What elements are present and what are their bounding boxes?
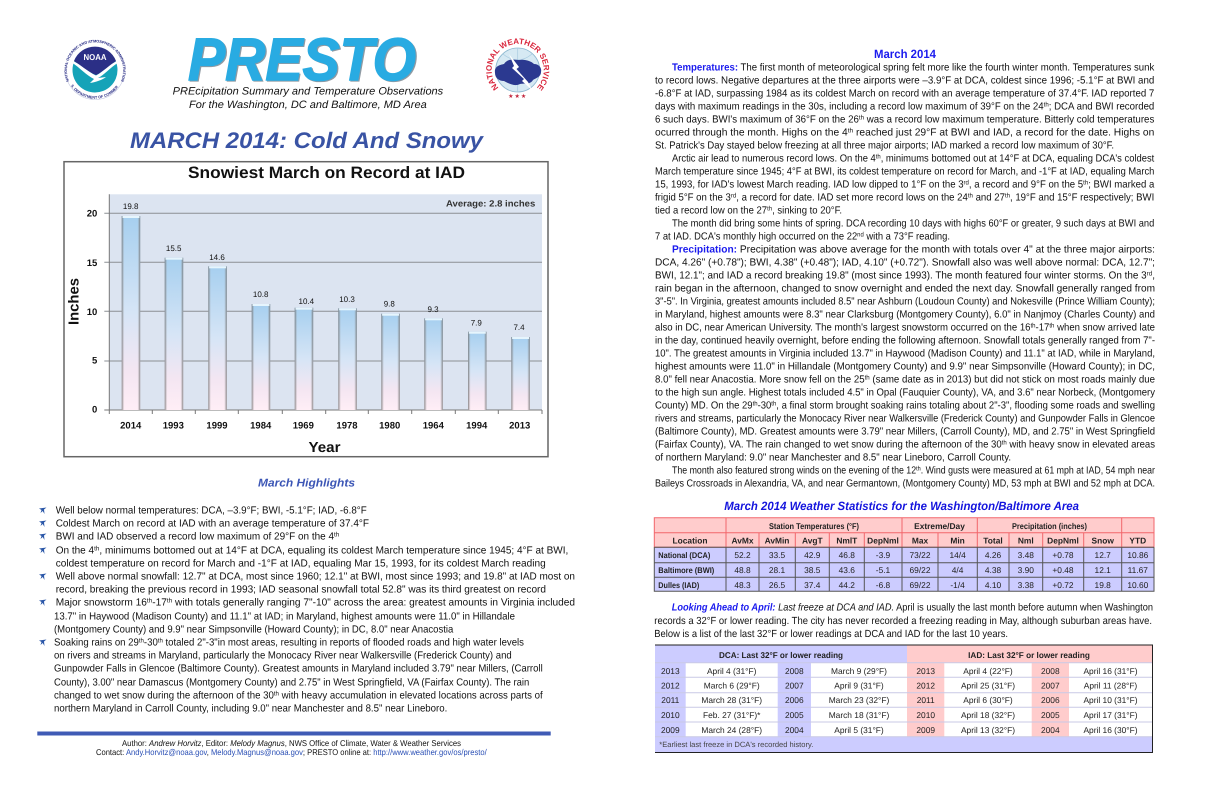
x axis labels: 2013 — [509, 420, 530, 432]
text block: temperatures: , a record and 9°F on the 5 — [969, 180, 1083, 191]
text block: precipitation: in the day, continued heavily overnight, before ending the following afternoon. Snowfall totals generally ranged from 7"- — [655, 336, 1155, 347]
row: National (DCA) — [658, 550, 1149, 560]
data labels: 14.6 — [209, 253, 225, 262]
text block: precipitation: of northern Maryland: 9.0" near Manchester and 8.5" near Lineboro, Carroll County. — [655, 453, 1011, 464]
text block: temperatures: rd — [731, 193, 737, 200]
text block: precipitation: -30 — [758, 401, 772, 412]
text block: precipitation: th — [1031, 323, 1036, 330]
text block: precipitation — [655, 245, 1156, 490]
IAD dates: April 13 (32°F) — [961, 725, 1015, 735]
data labels — [123, 202, 525, 332]
y axis title: Inches — [66, 278, 82, 325]
table header — [673, 521, 1146, 545]
text block: looking ahead to April: records a 32°F or lower reading. The city has never recorded a freezing reading in May, although suburban areas have. — [654, 616, 1152, 627]
y axis labels: 5 — [92, 356, 98, 366]
x axis labels: 1994 — [466, 420, 488, 432]
IAD dates: April 16 (31°F) — [1083, 666, 1138, 676]
text block: precipitation: th — [865, 375, 870, 382]
text block: precipitation: in Maryland, highest amounts were 8.3" near Clarksburg (Montgomery County), 6.0" in Nanjmoy (Charles County) and — [655, 310, 1155, 321]
text block: precipitation: , a final storm brought soaking rains totaling about 2"-3", flooding some roads and swelling — [776, 401, 1155, 412]
text block: temperatures: Temperatures: The first month of meteorological spring felt more like the fourth winter month. Temperatures sunk — [672, 63, 1155, 74]
y axis labels: 20 — [87, 208, 97, 220]
x axis labels: 1999 — [206, 420, 228, 432]
text block: precipitation: th — [771, 401, 777, 408]
DCA dates: March 6 (29°F) — [704, 680, 760, 690]
row: Baltimore (BWI): 4.38 — [985, 565, 1001, 575]
highlights text: Coldest March on record at IAD with an average temperature of 37.4°F — [56, 519, 369, 530]
highlights text: th — [167, 598, 173, 605]
text block: precipitation: also in DC, near American University. The month's largest snowstorm occurred on the 16 — [655, 323, 1059, 334]
IAD dates: April 10 (31°F) — [1083, 695, 1138, 705]
row: Dulles (IAD): 19.8 — [1095, 580, 1111, 590]
y axis labels: 15 — [87, 258, 98, 269]
text block: temperatures: 7 at IAD. DCA's monthly high occurred on the 22 — [655, 232, 877, 243]
IAD dates: April 16 (30°F) — [1083, 725, 1138, 735]
text block: temperatures: th — [1005, 193, 1010, 200]
table header: Total — [983, 535, 1003, 545]
data labels: 7.4 — [513, 323, 525, 332]
text block: temperatures: th — [876, 154, 881, 161]
footer credits: Contact: Andy.Horvitz@noaa.gov, Melody.Magnus@noaa.gov; PRESTO online at: http://www.weather.gov/os/presto/ — [96, 747, 487, 757]
row: Baltimore (BWI): 69/22 — [910, 565, 931, 575]
text block: precipitation: County) MD. On the 29 — [655, 401, 761, 412]
row: Baltimore (BWI): 11.67 — [1128, 565, 1148, 575]
text block: looking ahead to April: Looking Ahead to April: Last freeze at DCA and IAD. April is usually the last month before autumn when Washington — [672, 603, 1153, 614]
data labels: 9.8 — [384, 300, 395, 309]
footer credits — [96, 738, 487, 757]
highlights text: th — [139, 638, 144, 645]
row: Dulles (IAD): -1/4 — [950, 580, 965, 590]
table header: NmlT — [836, 535, 858, 545]
table header: Precipitation (inches) — [1012, 521, 1087, 531]
text block: temperatures: tied a record low on the 27 — [655, 206, 776, 217]
data labels: 9.3 — [427, 305, 439, 314]
text block: precipitation: Baileys Crossroads in Alexandria, VA, and near Germantown, (Montgomery County) MD, 53 mph at BWI and 52 mph at DCA. — [655, 479, 1155, 490]
text block: precipitation: -17 — [1036, 323, 1050, 334]
row: National (DCA): 73/22 — [910, 550, 931, 560]
IAD dates: 2011 — [917, 695, 935, 705]
row: National (DCA): 42.9 — [804, 550, 821, 560]
text block: precipitation: BWI, 12.1"; and IAD a record breaking 19.8" (most since 1993). The month featured four winter storms. On the 3 — [655, 271, 1166, 282]
IAD dates: 2012 — [916, 680, 935, 690]
row: Baltimore (BWI): 28.1 — [769, 565, 785, 575]
text block: precipitation: , — [1152, 271, 1155, 282]
highlights text: with heavy accumulation in elevated locations across parts of — [279, 690, 543, 701]
row: National (DCA): 3.48 — [1018, 550, 1034, 560]
text block: temperatures: -6.8°F at IAD, surpassing 1984 as its coldest March on record with an average temperature of 37.4°F. IAD reported 7 — [655, 89, 1155, 100]
text block: precipitation: (Baltimore County), MD. Greatest amounts were 3.79" near Millers, (Carroll County), MD, and 2.75" in West Springfield — [655, 427, 1155, 438]
data labels: 10.8 — [253, 290, 269, 299]
text block: precipitation: rd — [1147, 271, 1153, 278]
IAD dates: April 17 (31°F) — [1083, 710, 1138, 720]
row: National (DCA): 14/4 — [949, 550, 966, 560]
highlights text: Major snowstorm 16 — [56, 598, 148, 609]
text block: precipitation: rivers and streams, particularly the Monocacy River near Walkersville (Frederick County) and Gunpowder Falls in Glencoe — [655, 414, 1155, 425]
highlights text: coldest temperature on record for March and -1°F at IAD, equaling Mar 15, 1993, for its coldest March reading — [56, 559, 546, 570]
x axis labels: 1980 — [379, 420, 400, 432]
text block: precipitation: th — [1049, 323, 1055, 330]
row: National (DCA): 12.7 — [1095, 550, 1111, 560]
highlights text: On the 4 — [56, 546, 95, 557]
highlights text: totaled 2"-3"in most areas, resulting in reports of flooded roads and high water levels — [163, 638, 524, 649]
average note: Average: 2.8 inches — [446, 198, 535, 208]
DCA dates: 2011 — [661, 695, 680, 705]
text block: temperatures: th — [968, 193, 973, 200]
icon: PRESTO wordmark: PRESTO — [189, 27, 417, 94]
heading: weather statistics: March 2014 Weather Statistics for the Washington/Baltimore Area — [724, 499, 1079, 513]
icon: PRESTO wordmark: PRESTO — [188, 26, 416, 93]
table header: Min — [950, 535, 965, 545]
text block: temperatures: reached just 29°F at BWI and IAD, a record for the date. Highs on — [853, 128, 1155, 139]
row: Dulles (IAD): 37.4 — [804, 580, 821, 590]
text block: temperatures: th — [848, 128, 854, 135]
row: Baltimore (BWI): 43.6 — [839, 565, 855, 575]
IAD dates: April 11 (28°F) — [1084, 680, 1137, 690]
x axis labels: 1964 — [423, 420, 445, 432]
IAD dates — [916, 666, 1138, 735]
highlights bullets — [39, 508, 46, 646]
footnote: *Earliest last freeze in DCA's recorded history. — [659, 740, 813, 749]
text block: temperatures: th — [767, 206, 772, 213]
text block: temperatures: ocurred through the month. Highs on the 4 — [655, 128, 848, 139]
row: Dulles (IAD): 48.3 — [734, 580, 751, 590]
text block: temperatures: th — [859, 115, 864, 122]
text block: temperatures: The month did bring some hints of spring. DCA recording 10 days with highs 60°F or greater, 9 such days at BWI and — [672, 219, 1155, 230]
row: Dulles (IAD): 26.5 — [769, 580, 785, 590]
text block: precipitation: . Wind gusts were measured at 61 mph at IAD, 54 mph near — [921, 466, 1155, 477]
text block: temperatures: , a record for date. IAD set more record lows on the 24 — [736, 193, 968, 204]
icon: National Weather Service logo: NATIONAL WEATHER SERVICE — [486, 38, 550, 91]
highlights text: County), 3.00" near Damascus (Montgomery County) and 2.75" in West Springfield, VA (Fairfax County). The rain — [54, 677, 530, 688]
highlights text: , minimums bottomed out at 14°F at DCA, equaling its coldest March temperature since 1945; 4°F at BWI, — [99, 546, 568, 557]
text block: precipitation: with heavy snow in elevated areas — [1007, 440, 1155, 451]
subtitle — [173, 86, 444, 111]
x axis labels: 1969 — [293, 420, 314, 432]
highlights text: th — [158, 638, 163, 645]
row: Baltimore (BWI): 4/4 — [952, 565, 964, 575]
table header: Nml — [1018, 535, 1034, 545]
IAD dates: April 25 (31°F) — [961, 680, 1015, 690]
title: MARCH 2014: Cold And Snowy — [130, 128, 485, 153]
highlights text: th — [274, 690, 279, 697]
text block: precipitation: (same date as in 2013) but did not stick on most roads mainly due — [870, 375, 1155, 386]
x axis labels: 1984 — [250, 420, 272, 432]
row: National (DCA): -3.9 — [876, 550, 891, 560]
DCA dates: 2004 — [785, 725, 804, 735]
table header: DepNml — [867, 535, 899, 545]
row: National (DCA): 46.8 — [839, 550, 855, 560]
highlights text: th — [334, 532, 340, 539]
text block: temperatures: ; DCA and BWI recorded — [1049, 102, 1155, 113]
icon: NOAA logo: NATIONAL OCEANIC AND ATMOSPHERIC ADMINISTRATION — [64, 40, 126, 82]
table header: AvMin — [765, 535, 789, 545]
row: Dulles (IAD): -6.8 — [876, 580, 891, 590]
text block: temperatures: , minimums bottomed out at 14°F at DCA, equaling DCA's coldest — [881, 154, 1154, 165]
highlights text: Well above normal snowfall: 12.7" at DCA, most since 1960; 12.1" at BWI, most since 1993; and 19.8" at IAD most on — [56, 572, 575, 583]
text block: precipitation: 8.0" fell near Anacostia. More snow fell on the 25 — [655, 375, 878, 386]
DCA dates: March 23 (32°F) — [829, 695, 890, 705]
highlights text: record, breaking the previous record in 1993; IAD seasonal snowfall total 52.8" was its third greatest on record — [56, 585, 546, 596]
table header: Location — [673, 535, 707, 545]
row: Dulles (IAD): +0.72 — [1052, 580, 1074, 590]
highlights text: with totals generally ranging 7"-10" across the area: greatest amounts in Virginia included — [172, 598, 575, 609]
IAD dates: April 18 (32°F) — [961, 710, 1015, 720]
DCA dates: March 28 (31°F) — [701, 695, 762, 705]
heading: March 2014: March 2014 — [874, 47, 936, 61]
table header: Station Temperatures (°F) — [769, 521, 859, 531]
subtitle: PREcipitation Summary and Temperature Observations — [173, 86, 444, 98]
text block: precipitation: The month also featured strong winds on the evening of the 12 — [672, 466, 958, 477]
text block: precipitation: 3"-5". In Virginia, greatest amounts included 8.5" near Ashburn (Loudoun County) and Nokesville (Prince William County); — [655, 297, 1155, 308]
DCA dates: 2006 — [785, 695, 804, 705]
text block: temperatures: nd — [857, 232, 864, 239]
highlights text: Gunpowder Falls in Glencoe (Baltimore County). Greatest amounts in Maryland included 3.79" near Millers, (Carroll — [54, 664, 543, 675]
highlights text: on rivers and streams in Maryland, particularly the Monocacy River near Walkersville (Frederick County) and — [54, 651, 512, 662]
highlights text: -30 — [144, 638, 158, 649]
highlights text: (Montgomery County) and 9.9" near Simpsonville (Howard County); in DC, 8.0" near Anacostia — [54, 625, 454, 636]
data labels: 19.8 — [123, 202, 139, 211]
table header: AvMx — [731, 535, 754, 545]
icon: NOAA logo: NOAA — [84, 52, 106, 62]
chart title: Snowiest March on Record at IAD — [188, 164, 465, 182]
highlights text: BWI and IAD observed a record low maximum of 29°F on the 4 — [56, 532, 343, 543]
data labels: 7.9 — [471, 318, 482, 327]
heading: March Highlights: March Highlights — [258, 478, 355, 490]
DCA dates: April 5 (31°F) — [834, 725, 884, 735]
text block: temperatures: with a 73°F reading. — [864, 232, 950, 243]
y axis labels: 0 — [92, 404, 97, 416]
table header: Snow — [1092, 535, 1114, 545]
row: Baltimore (BWI): 3.90 — [1018, 565, 1034, 575]
highlights text: th — [94, 546, 100, 553]
DCA dates: 2008 — [785, 666, 804, 676]
text block: temperatures: th — [1083, 180, 1089, 187]
IAD dates: April 6 (30°F) — [963, 695, 1013, 705]
text block: looking ahead to April: Below is a list of the last 32°F or lower readings at DCA and IAD for the last 10 years. — [654, 629, 1008, 640]
DCA header: DCA: Last 32°F or lower reading — [719, 650, 843, 660]
text block: temperatures: St. Patrick's Day stayed below freezing at all three major airports; IAD marked a record low maximum of 30°F. — [655, 141, 1114, 152]
table header: Extreme/Day — [914, 521, 965, 531]
DCA dates: 2010 — [661, 710, 680, 720]
text block: temperatures: and 27 — [973, 193, 1005, 204]
DCA dates: April 9 (31°F) — [834, 680, 884, 690]
footer credits: Author: Andrew Horvitz, Editor: Melody Magnus, NWS Office of Climate, Water & Weather Services — [122, 738, 461, 748]
table header: AvgT — [802, 535, 823, 545]
table header: Max — [912, 535, 928, 545]
text block: temperatures — [655, 63, 1155, 243]
highlights text: northern Maryland in Carroll County, including 9.0" near Manchester and 8.5" near Lineboro. — [54, 704, 447, 715]
x axis labels — [120, 420, 530, 432]
text block: temperatures: 15, 1993, for IAD's lowest March reading. IAD low dipped to 1°F on the 3 — [655, 180, 986, 191]
text block: temperatures: , 19°F and 15°F respectively; BWI — [1010, 193, 1154, 204]
IAD header: IAD: Last 32°F or lower reading — [968, 650, 1090, 660]
text block: temperatures: March temperature since 1945; 4°F at BWI, its coldest temperature on record for March, and -1°F at IAD, equaling March — [655, 167, 1155, 178]
row: National (DCA): 52.2 — [734, 550, 751, 560]
footer rule — [37, 732, 551, 736]
data labels: 15.5 — [166, 244, 182, 253]
data labels: 10.3 — [339, 295, 355, 304]
row: Dulles (IAD): 44.2 — [839, 580, 855, 590]
x axis labels: 1993 — [163, 420, 184, 432]
row: National (DCA): 4.26 — [985, 550, 1001, 560]
row: Baltimore (BWI): -5.1 — [876, 565, 891, 575]
IAD dates: 2004 — [1041, 725, 1060, 735]
highlights text: changed to wet snow during the afternoon of the 30 — [54, 690, 289, 701]
DCA dates: April 4 (31°F) — [707, 666, 757, 676]
text block: precipitation: highest amounts were 11.0" in Hillandale (Montgomery County) and 9.9" near Simpsonville (Howard County); in DC, — [655, 362, 1155, 373]
DCA dates: 2013 — [661, 666, 680, 676]
text block: precipitation: 10". The greatest amounts in Virginia included 13.7" in Haywood (Madison County) and 11.1" at IAD, while in Maryland, — [655, 349, 1155, 360]
text block: precipitation: when snow arrived late — [1054, 323, 1155, 334]
highlights text: Well below normal temperatures: DCA, –3.9°F; BWI, -5.1°F; IAD, -6.8°F — [56, 506, 367, 517]
DCA dates — [661, 666, 890, 735]
y axis labels: 10 — [87, 307, 97, 318]
highlights text: th — [147, 598, 153, 605]
text block: precipitation: rain began in the afternoon, changed to snow overnight and ended the next day. Snowfall generally ranged from — [655, 284, 1155, 295]
row: Dulles (IAD): Dulles (IAD) — [658, 581, 700, 590]
DCA dates: 2005 — [785, 710, 804, 720]
row: Baltimore (BWI): 38.5 — [804, 565, 821, 575]
IAD dates: 2008 — [1041, 666, 1060, 676]
text block: precipitation: th — [916, 466, 921, 473]
row: Baltimore (BWI) — [658, 565, 1148, 575]
highlights text — [54, 506, 575, 715]
row: Baltimore (BWI): 12.1 — [1095, 565, 1111, 575]
IAD dates: 2005 — [1041, 710, 1060, 720]
text block: precipitation: DCA, 4.26" (+0.78"); BWI, 4.38" (+0.48"); IAD, 4.10" (+0.72"). Snowfall also was well above normal: DCA, 12.7"; — [655, 258, 1155, 269]
text block: temperatures: 6 such days. BWI's maximum of 36°F on the 26 — [655, 115, 872, 126]
icon: National Weather Service logo: ★★★ — [508, 93, 527, 100]
text block: temperatures: ; BWI marked a — [1088, 180, 1155, 191]
DCA dates: 2009 — [661, 725, 680, 735]
text block: temperatures: Arctic air lead to numerous record lows. On the 4 — [672, 154, 895, 165]
DCA dates: Feb. 27 (31°F)* — [703, 710, 761, 720]
text block: temperatures: to record lows. Negative departures at the three airports were –3.9°F at DCA, coldest since 1996; -5.1°F at BWI and — [655, 76, 1155, 87]
text block: precipitation: (Fairfax County), VA. The rain changed to wet snow during the afternoon of the 30 — [655, 440, 1028, 451]
text block: precipitation: th — [1002, 440, 1007, 447]
table header: DepNml — [1047, 535, 1079, 545]
text block: temperatures: , sinking to 20°F. — [772, 206, 842, 217]
row: National (DCA): +0.78 — [1052, 550, 1074, 560]
DCA dates: 2007 — [785, 680, 804, 690]
subtitle: For the Washington, DC and Baltimore, MD Area — [189, 99, 427, 111]
IAD dates: 2009 — [916, 725, 935, 735]
text block: looking ahead to April — [654, 603, 1153, 640]
row: Baltimore (BWI): Baltimore (BWI) — [658, 566, 715, 575]
bars — [122, 216, 530, 410]
IAD dates: 2007 — [1041, 680, 1060, 690]
row: Dulles (IAD): 4.10 — [985, 580, 1001, 590]
row: Dulles (IAD): 3.38 — [1018, 580, 1034, 590]
DCA dates: March 18 (31°F) — [829, 710, 890, 720]
text block: temperatures: was a record low maximum temperature. Bitterly cold temperatures — [864, 115, 1154, 126]
x axis labels: 1978 — [336, 420, 358, 432]
IAD dates: April 4 (22°F) — [963, 666, 1013, 676]
IAD dates: 2010 — [916, 710, 935, 720]
IAD dates: 2006 — [1041, 695, 1060, 705]
table: weather statistics — [654, 518, 1154, 591]
table: last freeze dates — [655, 645, 1152, 752]
DCA dates: March 9 (29°F) — [831, 666, 887, 676]
DCA dates: March 24 (28°F) — [701, 725, 762, 735]
y axis labels — [87, 208, 98, 416]
row: Baltimore (BWI): +0.48 — [1052, 565, 1074, 575]
row: Dulles (IAD) — [658, 580, 1149, 590]
text block: temperatures: rd — [964, 180, 969, 187]
row: National (DCA): 33.5 — [769, 550, 785, 560]
data labels: 10.4 — [299, 297, 315, 306]
text block: precipitation: to the high sun angle. Highest totals included 4.5" in Opal (Fauquier County), VA, and 3.6" near Norbeck, (Montgomery — [655, 388, 1156, 399]
text block: temperatures: th — [1044, 102, 1049, 109]
bar chart: snowiest March on record at IAD — [64, 162, 548, 457]
text block: temperatures: frigid 5°F on the 3 — [655, 193, 736, 204]
row: Dulles (IAD): 10.60 — [1127, 580, 1149, 590]
text block: precipitation: Precipitation: Precipitation was above average for the month with totals over 4" at the three major airports: — [672, 245, 1155, 256]
IAD dates: 2013 — [916, 666, 935, 676]
text block: precipitation: th — [753, 401, 758, 408]
x axis title: Year — [308, 440, 341, 456]
text block: temperatures: days with maximum readings in the 30s, including a record low maximum of 39°F on the 24 — [655, 102, 1070, 113]
highlights text: 13.7" in Haywood (Madison County) and 11.1" at IAD; in Maryland, highest amounts were 11.0" in Hillandale — [54, 612, 515, 623]
table header: YTD — [1129, 535, 1146, 545]
row: National (DCA): 10.86 — [1127, 550, 1149, 560]
highlights text: -17 — [152, 598, 167, 609]
highlights text: Soaking rains on 29 — [54, 638, 145, 649]
row: Baltimore (BWI): 48.8 — [734, 565, 751, 575]
row: National (DCA): National (DCA) — [658, 551, 711, 560]
DCA dates: 2012 — [661, 680, 680, 690]
x axis labels: 2014 — [120, 420, 142, 432]
row: Dulles (IAD): 69/22 — [910, 580, 931, 590]
